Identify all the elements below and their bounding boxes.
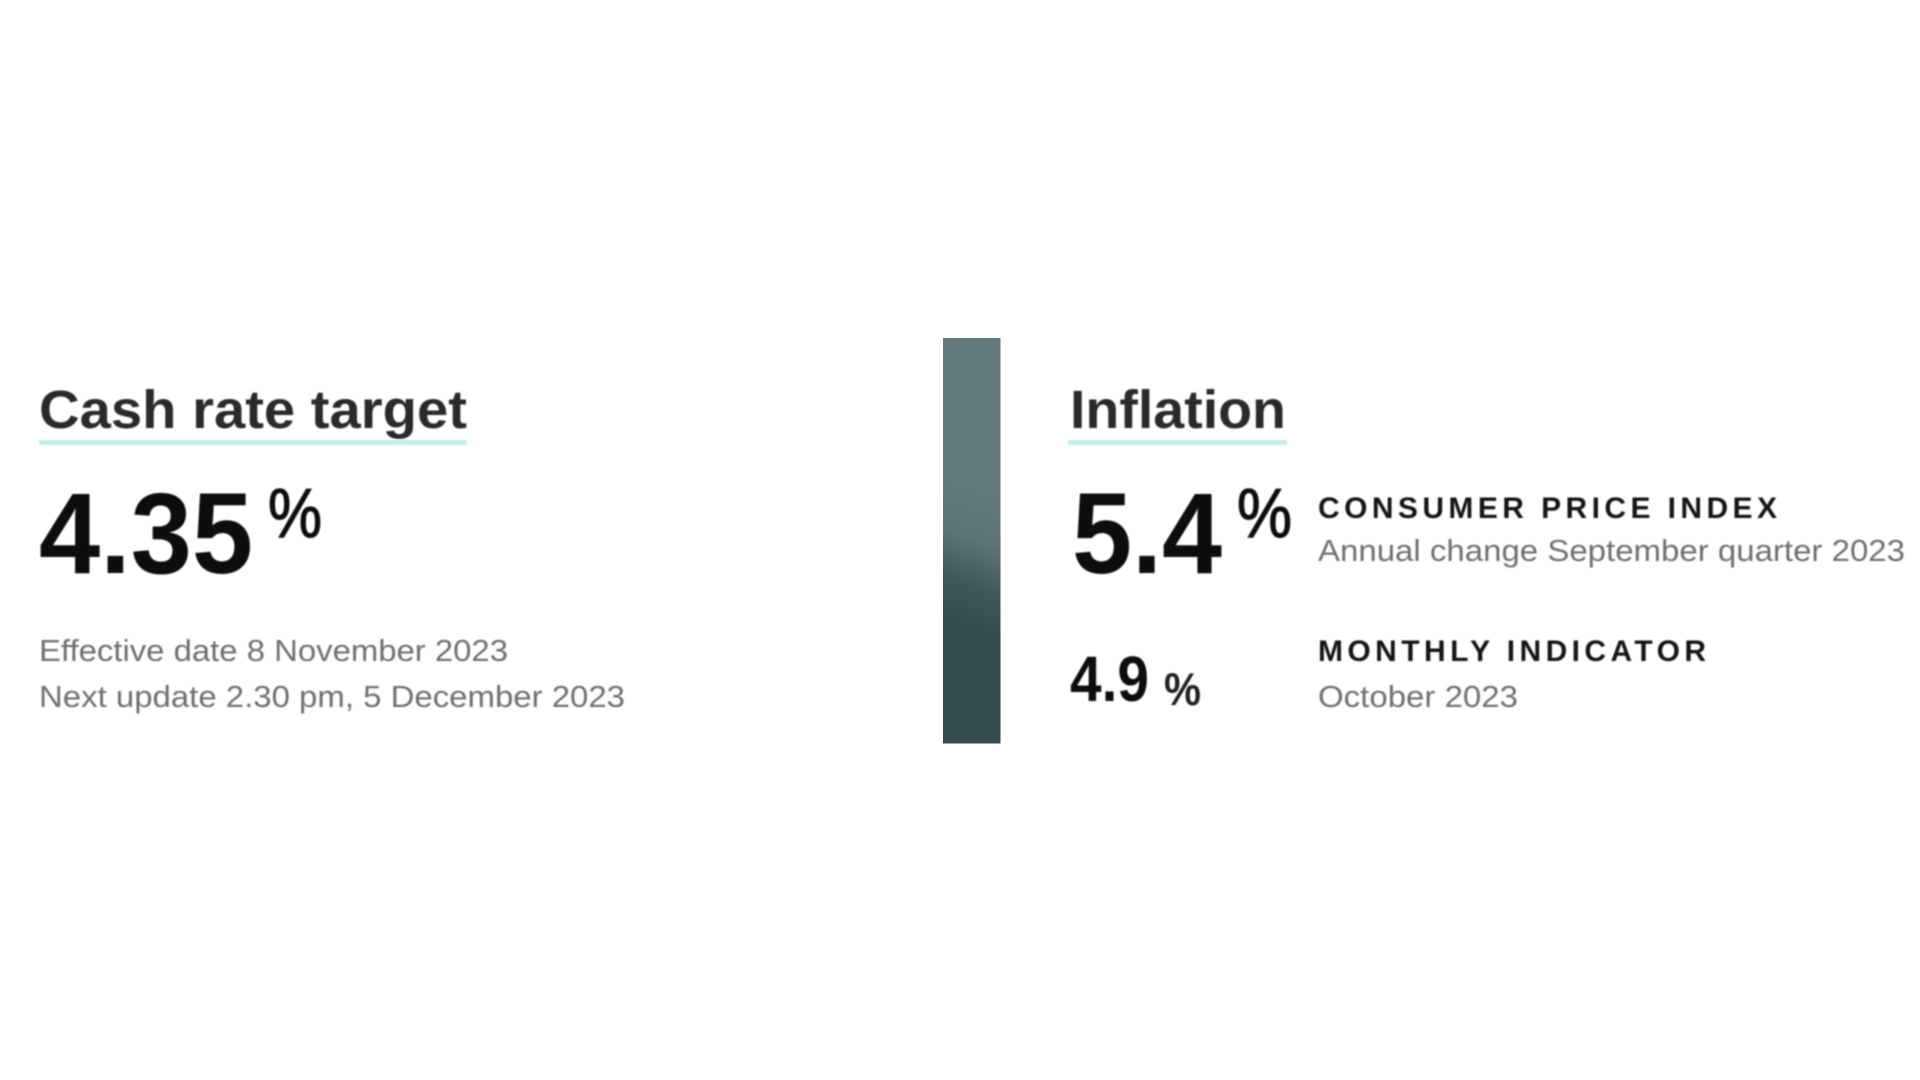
value: 4.9 percent: 4.9 bbox=[1070, 643, 1149, 715]
panel: cash rate target bbox=[39, 380, 625, 714]
text: annual change: Annual change September quarter 2023 bbox=[1318, 533, 1905, 568]
heading underline: cash rate target bbox=[39, 440, 467, 445]
text: october 2023: October 2023 bbox=[1318, 679, 1518, 714]
percent sign: CPI: % bbox=[1237, 474, 1292, 552]
heading: inflation: Inflation bbox=[1070, 380, 1286, 440]
divider bar bbox=[943, 338, 1000, 744]
panel: inflation bbox=[1068, 380, 1905, 715]
value: 5.4 percent: 5.4 bbox=[1072, 470, 1222, 598]
text: effective date: Effective date 8 November 2023 bbox=[39, 633, 508, 668]
heading: cash rate target: Cash rate target bbox=[39, 380, 467, 440]
heading underline: inflation bbox=[1068, 440, 1287, 445]
percent sign: cash rate: % bbox=[268, 474, 322, 552]
percent sign: monthly: % bbox=[1164, 663, 1201, 715]
text: next update: Next update 2.30 pm, 5 December 2023 bbox=[39, 679, 625, 714]
value: 4.35 percent: 4.35 bbox=[39, 470, 253, 598]
label: monthly indicator: MONTHLY INDICATOR bbox=[1318, 635, 1706, 668]
label: consumer price index: CONSUMER PRICE INDEX bbox=[1318, 492, 1777, 525]
